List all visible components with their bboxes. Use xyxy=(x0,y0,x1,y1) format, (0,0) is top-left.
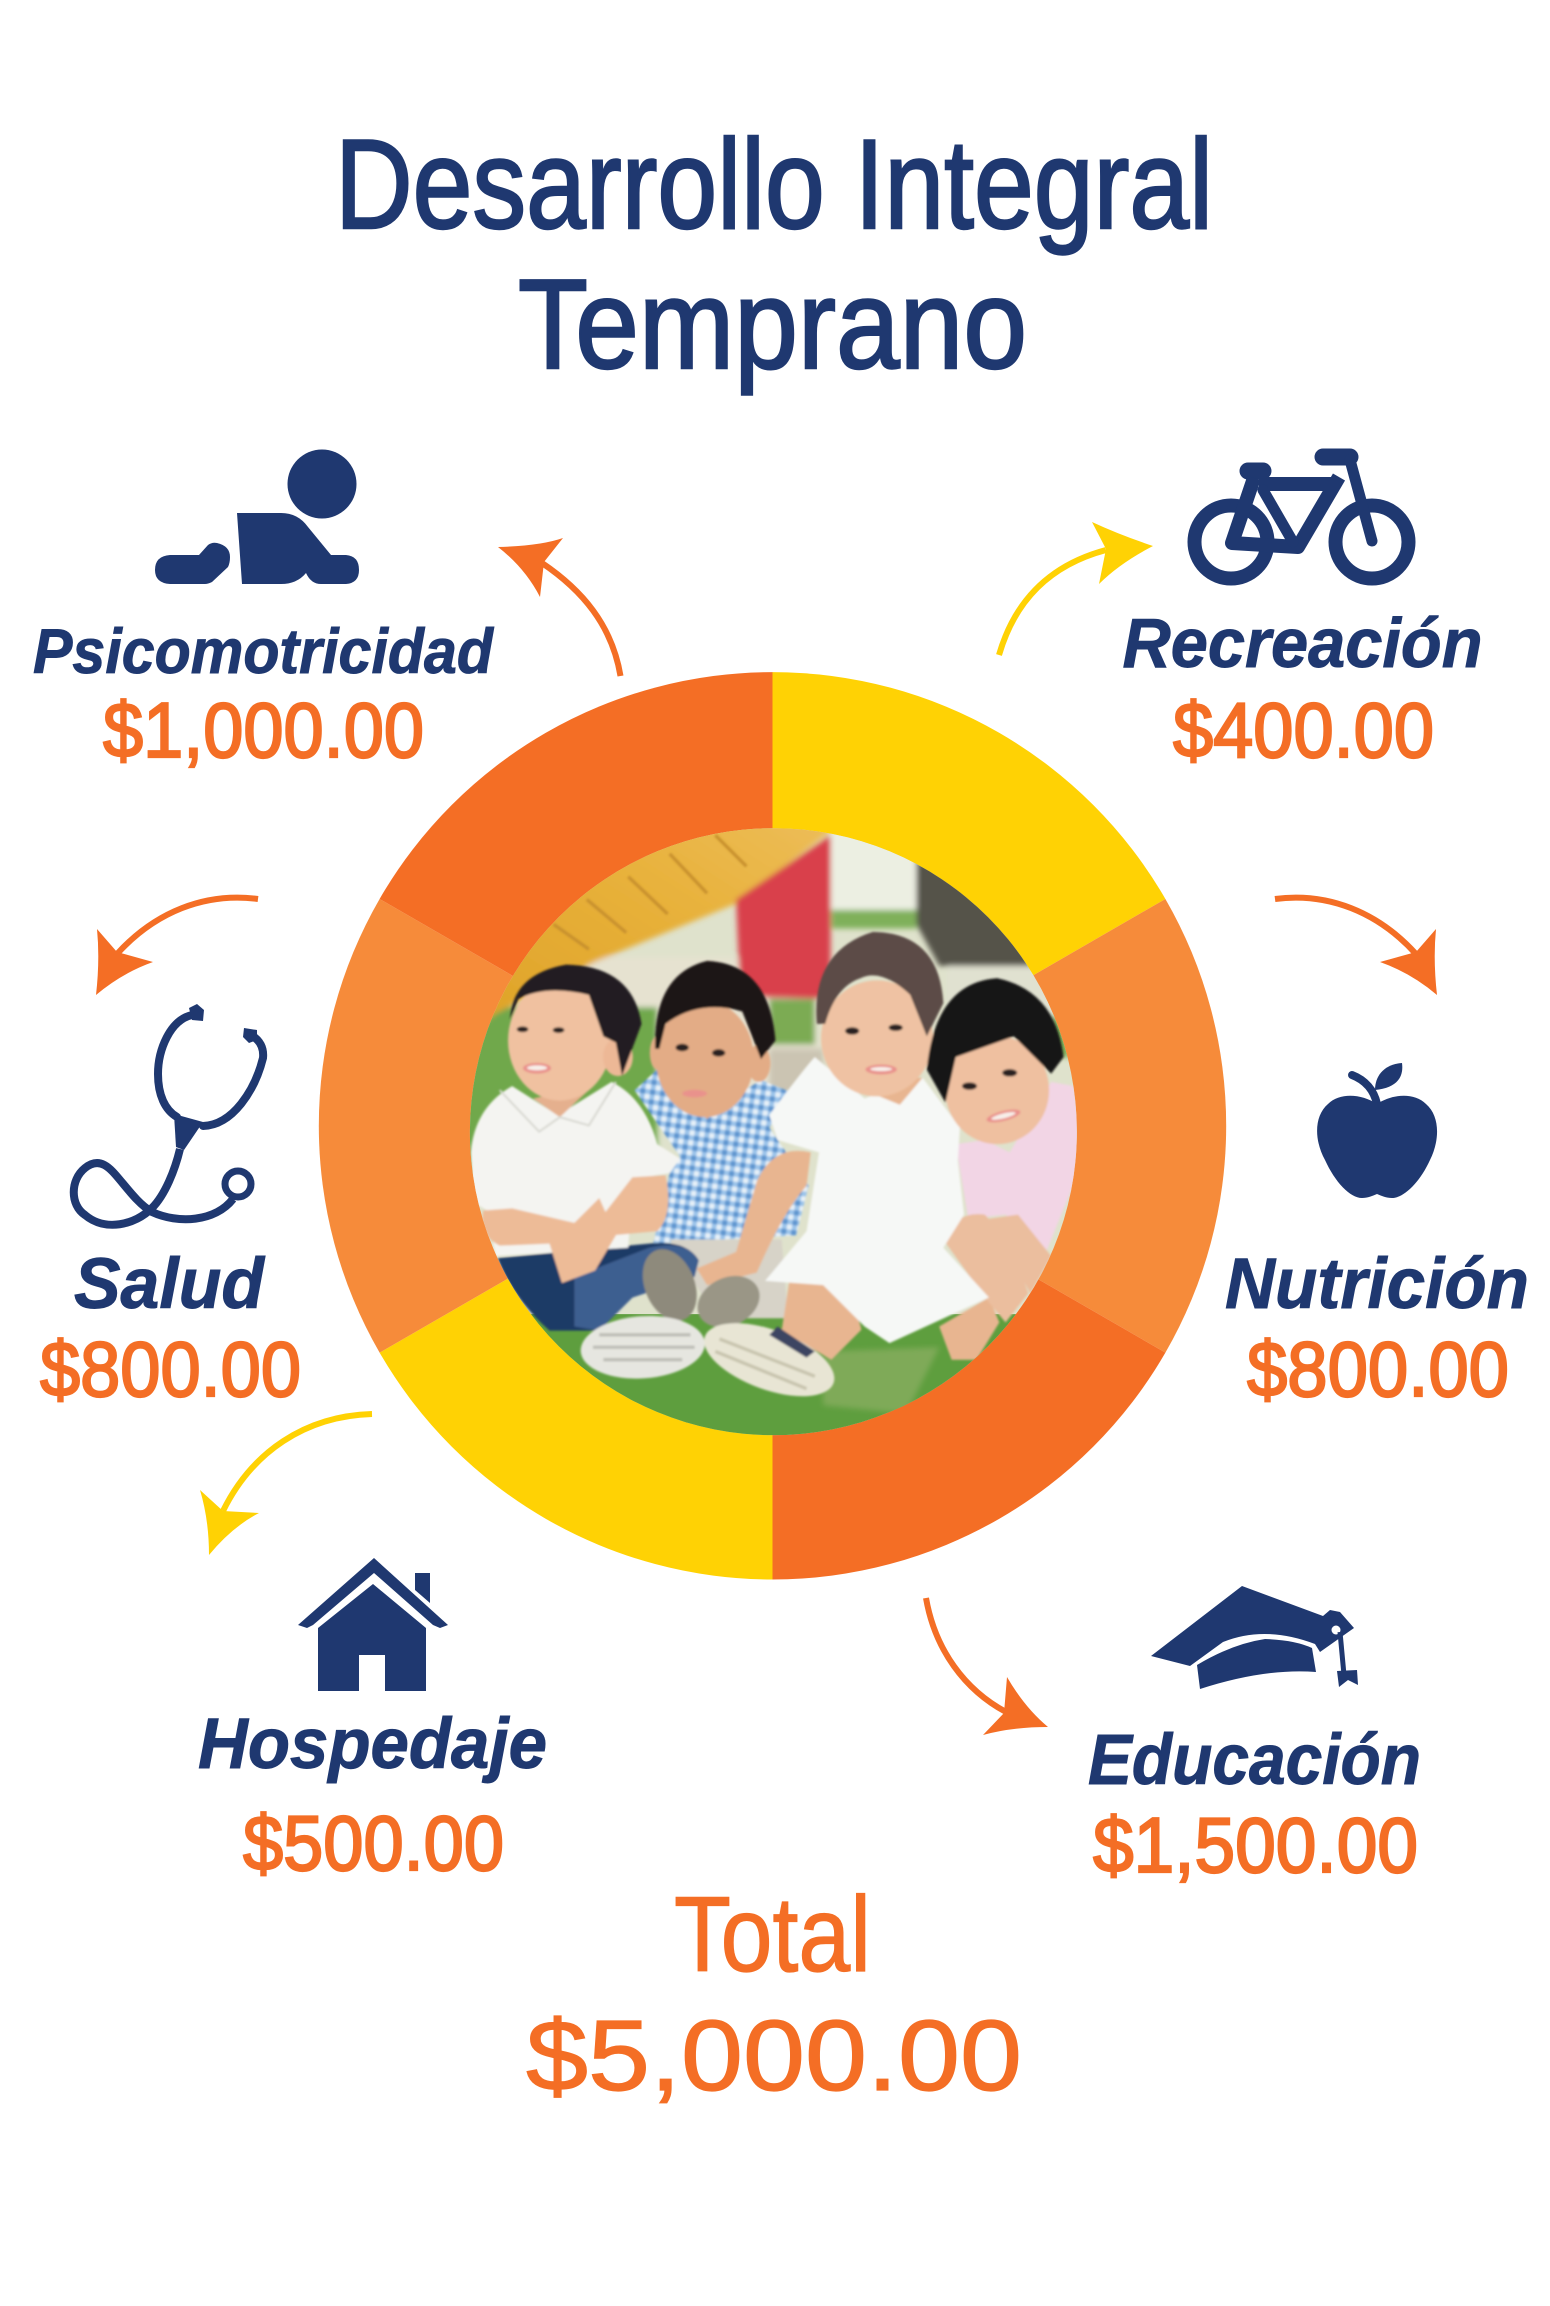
panel: Hospedaje: Hospedaje xyxy=(198,1705,547,1784)
icon: graduation cap xyxy=(1151,1586,1358,1689)
panel: Salud: $800.00 xyxy=(40,1325,301,1413)
icon: bicycle xyxy=(1194,457,1408,578)
arrow: to Salud xyxy=(96,898,258,995)
panel: Psicomotricidad: Psicomotricidad xyxy=(33,617,494,687)
total xyxy=(526,1874,1022,2112)
title xyxy=(335,113,1213,395)
arrow: to Hospedaje xyxy=(200,1414,372,1555)
panel: Nutrición: Nutrición xyxy=(1225,1245,1529,1324)
panel: Hospedaje: $500.00 xyxy=(243,1799,504,1887)
panel: Salud xyxy=(40,1004,301,1413)
panel: Nutrición: $800.00 xyxy=(1247,1325,1509,1413)
kid 3 arm and legs xyxy=(697,1151,811,1285)
kid 2 shirt xyxy=(634,1069,809,1244)
title: Temprano xyxy=(518,253,1027,395)
panel: Salud: Salud xyxy=(74,1245,266,1324)
kid 1 body xyxy=(498,1243,699,1331)
title: Desarrollo Integral xyxy=(335,113,1213,255)
kid heads xyxy=(508,980,612,1101)
panel: Psicomotricidad xyxy=(33,450,494,774)
panel: Recreación: Recreación xyxy=(1122,604,1482,682)
arrow: to Psicomotricidad xyxy=(498,538,620,676)
icon: baby crawling xyxy=(155,450,359,584)
icon: stethoscope xyxy=(74,1004,263,1225)
shoes xyxy=(641,1248,698,1322)
panel: Educación: Educación xyxy=(1088,1721,1421,1800)
total: $5,000.00 xyxy=(526,2000,1022,2112)
donut chart xyxy=(319,672,1226,1580)
circular photo of four children xyxy=(470,828,1077,1436)
arrow: to Recreación xyxy=(999,522,1153,655)
panel: Psicomotricidad: $1,000.00 xyxy=(103,686,424,774)
panel: Educación: $1,500.00 xyxy=(1093,1801,1418,1889)
panel: Recreación xyxy=(1122,457,1482,774)
icon: apple xyxy=(1317,1063,1437,1198)
panel: Nutrición xyxy=(1225,1063,1529,1413)
arrow: to Educación xyxy=(926,1598,1048,1735)
kid 4 legs and shirt xyxy=(956,1082,1078,1250)
kid 3 dress xyxy=(765,1057,989,1343)
panel: Recreación: $400.00 xyxy=(1173,686,1434,774)
arrow: to Nutrición xyxy=(1275,898,1437,995)
panel: Educación xyxy=(1088,1586,1421,1889)
kid faces xyxy=(517,1024,1017,1090)
total: Total xyxy=(674,1874,871,1994)
icon: house xyxy=(298,1558,448,1691)
panel: Hospedaje xyxy=(198,1558,547,1887)
